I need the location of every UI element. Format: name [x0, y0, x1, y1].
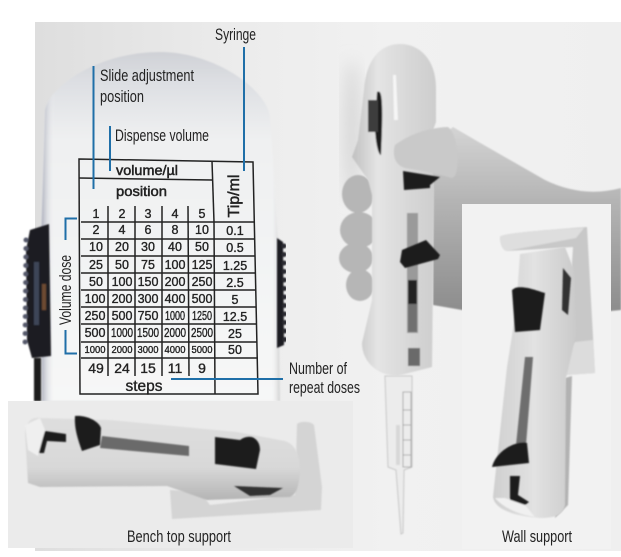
pipette body — [352, 44, 436, 376]
dosing table: 100 — [165, 258, 185, 272]
dosing table: 15 — [140, 360, 156, 376]
dosing table: 125 — [192, 258, 212, 272]
window and knobs — [492, 268, 571, 517]
dosing table: 100 — [85, 292, 105, 306]
dosing table: Tip/ml — [226, 175, 243, 217]
dosing table: 1000 — [111, 326, 133, 340]
panel: wall support photo — [462, 204, 611, 549]
dosing table: 1000 — [84, 344, 106, 356]
dosing table: 10 — [195, 223, 209, 237]
dosing table: 2.5 — [226, 276, 244, 290]
dosing table: 100 — [112, 275, 132, 289]
arm and hand behind the pipette — [400, 127, 621, 312]
callout: slide adjustment position — [92, 66, 194, 189]
dosing table: 4 — [119, 223, 126, 237]
dosing table: 2 — [93, 223, 100, 237]
icon: right adjustment dial — [277, 238, 285, 348]
dosing table: 500 — [85, 326, 105, 340]
window and knobs — [25, 416, 283, 496]
dosing table: 1000 — [165, 309, 185, 323]
dosing table: 5000 — [192, 344, 213, 356]
panel: syringe scale card with dosing table — [25, 52, 285, 401]
dosing table: 40 — [168, 240, 182, 254]
dosing table: 12.5 — [223, 310, 247, 324]
device body — [555, 376, 572, 518]
dosing table: 10 — [89, 240, 103, 254]
device body — [25, 418, 300, 500]
dosing table: 250 — [192, 275, 212, 289]
label: Wall support — [502, 528, 572, 546]
dosing table: 11 — [168, 360, 182, 376]
dosing table: 25 — [228, 327, 242, 341]
dosing table: 24 — [114, 360, 130, 376]
dosing table: 30 — [141, 240, 155, 254]
dosing table: 9 — [198, 360, 206, 376]
icon: left adjustment dial — [25, 224, 51, 401]
syringe tip — [385, 376, 412, 534]
callout: dispense volume: Dispense volume — [115, 127, 209, 145]
slide window — [407, 213, 418, 333]
dosing table: 750 — [138, 309, 158, 323]
icon: pipette slide knob — [400, 240, 440, 268]
callout: volume dose bracket: Volume dose — [57, 255, 75, 325]
dosing table: 50 — [89, 275, 103, 289]
dosing table: 2000 — [112, 344, 133, 356]
dosing table: 75 — [141, 258, 155, 272]
dosing table: 20 — [115, 240, 129, 254]
callout: number of repeat doses: Number of — [289, 360, 347, 378]
dosing table: 3 — [145, 207, 152, 221]
dosing table: volume/µl — [116, 162, 178, 178]
dosing table: 200 — [112, 292, 132, 306]
soft shadow beside pipette — [344, 60, 360, 200]
dosing table: 8 — [172, 223, 179, 237]
callout: dispense volume — [109, 126, 209, 171]
callout: slide adjustment position: position — [100, 88, 144, 106]
dosing table: 50 — [195, 240, 209, 254]
dosing table: 150 — [138, 275, 158, 289]
dosing table: 2500 — [191, 326, 213, 340]
dosing table: 4000 — [164, 344, 186, 356]
dosing table: 25 — [89, 258, 103, 272]
dosing table: 0.5 — [226, 241, 244, 255]
support bracket — [500, 227, 595, 375]
dosing table: 2 — [119, 207, 126, 221]
icon: fingers — [339, 175, 378, 301]
dosing table: position — [116, 183, 167, 199]
dosing table: 1.25 — [223, 259, 247, 273]
icon: pipette thumb — [394, 127, 458, 178]
dosing table: 200 — [165, 275, 185, 289]
dosing table: 2000 — [164, 326, 186, 340]
card body — [41, 52, 280, 401]
dosing table: 250 — [85, 309, 105, 323]
dosing table: 1250 — [192, 309, 212, 323]
callout: slide adjustment position: Slide adjustment — [100, 67, 194, 85]
dosing table: 500 — [192, 292, 212, 306]
dosing table: 400 — [165, 292, 185, 306]
dosing table: 49 — [88, 360, 104, 376]
panel: bench top support photo — [8, 401, 353, 548]
dosing table: 1 — [93, 207, 100, 221]
callout: number of repeat doses: repeat doses — [289, 379, 360, 397]
dosing table: 3000 — [138, 344, 159, 356]
dosing table: 0.1 — [226, 224, 244, 238]
callout: syringe: Syringe — [215, 26, 256, 44]
icon: pipette upper lever — [403, 171, 440, 190]
dosing table: 300 — [138, 292, 158, 306]
callout: volume dose bracket — [57, 218, 77, 354]
dosing table: 500 — [112, 309, 132, 323]
callout: number of repeat doses — [171, 360, 360, 397]
dosing table — [79, 159, 258, 395]
dosing table: 50 — [115, 258, 129, 272]
dosing table: 6 — [145, 223, 152, 237]
support bracket — [170, 422, 322, 519]
dosing table: 5 — [199, 207, 206, 221]
dosing table: 4 — [172, 207, 179, 221]
label: Bench top support — [127, 528, 231, 546]
dosing table: 1500 — [137, 326, 159, 340]
dosing table: steps — [125, 378, 163, 395]
dosing table: 50 — [228, 343, 242, 357]
dosing table: 5 — [232, 293, 239, 307]
